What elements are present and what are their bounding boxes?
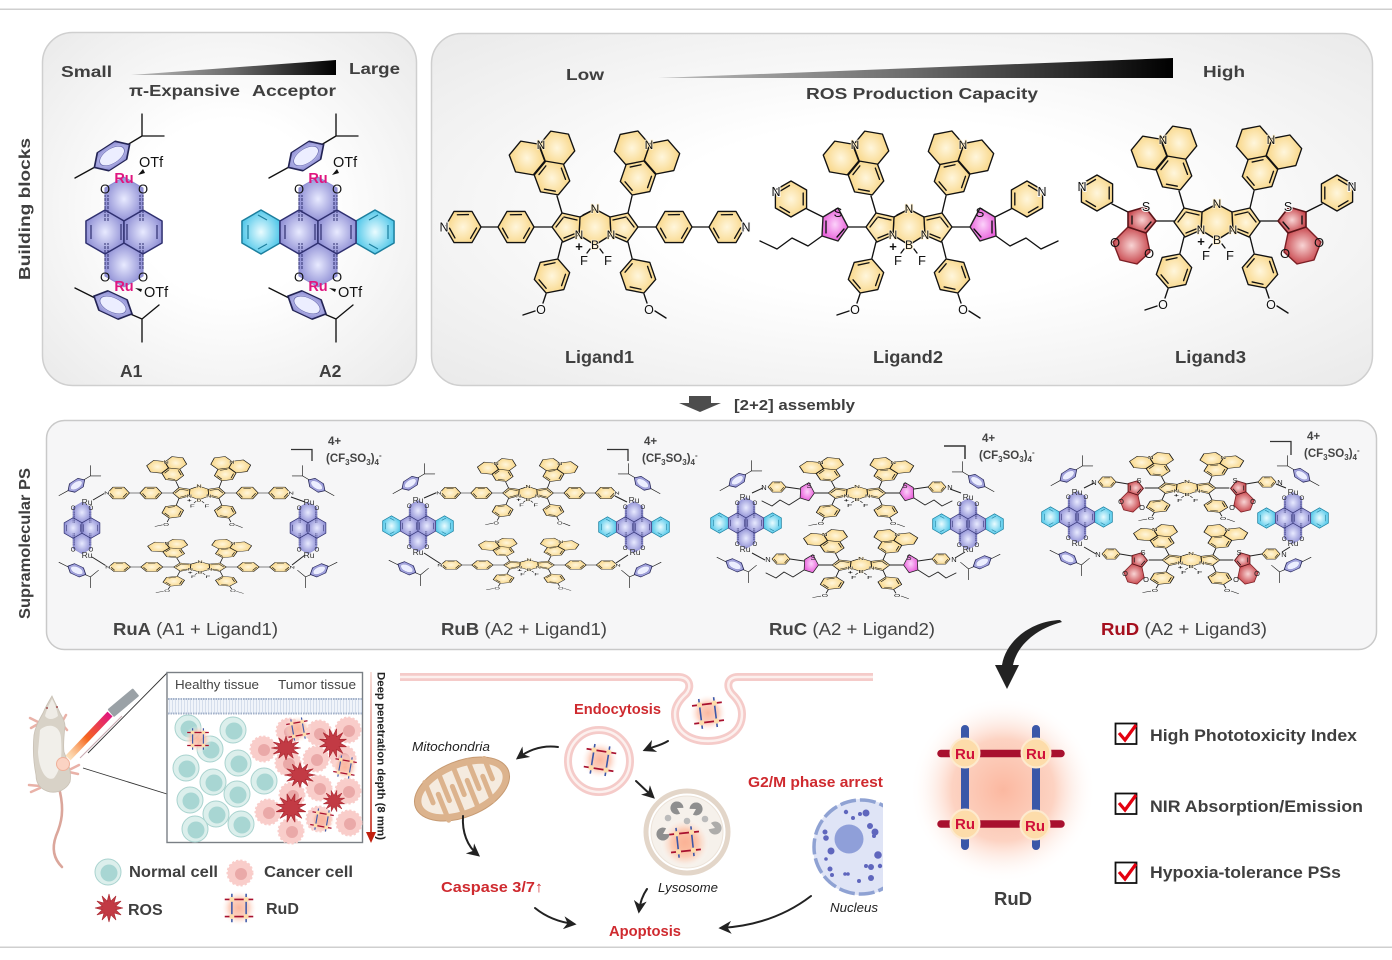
charge bracket RuA: SO [350,453,366,465]
arrow: caspase to apoptosis [535,908,574,924]
charge bracket RuB [607,436,698,467]
complex RuC: Ru [740,492,751,502]
zoom lines from mouse to tissue [83,673,167,794]
label: Ligand2: Ligand2 [873,347,943,367]
label: RuD: RuD [994,888,1032,909]
charge bracket RuD: 3 [1323,453,1328,462]
label: [2+2] assembly: [2+2] assembly [734,397,856,414]
charge bracket RuC: - [1032,448,1035,457]
caption: π-Expansive Acceptor: π-Expansive [129,83,240,100]
molecule A2: Ru [308,279,328,295]
charge bracket RuB: 4 [691,458,696,467]
label: A2: A2 [319,361,342,381]
charge bracket RuD: 4+ [1307,431,1320,443]
rotated heading: Supramolecular PS: Supramolecular PS [17,468,34,619]
charge bracket RuC: SO [1003,450,1019,462]
complex RuC: Ru [963,544,974,554]
arrow: penetration depth [366,672,376,843]
charge bracket RuA: 4+ [328,436,341,448]
arrow: mitochondria to caspase [463,816,478,855]
label: Caspase 3/7 up: Caspase 3/7↑ [441,879,543,896]
gradient wedge [658,58,1173,78]
pathway arrows [463,741,811,928]
membrane band [168,698,362,714]
arrow: pocket to vesicle [645,741,668,750]
charge bracket RuC: 4+ [982,433,995,445]
complex RuA: Ru [82,497,93,507]
icon: RuD in pocket [687,692,729,734]
label: RuC: RuC (A2 + Ligand2) [769,619,935,639]
caption: ROS Production Capacity: ROS Production Capacity [806,86,1038,103]
label: Apoptosis: Apoptosis [609,923,681,940]
checklist [1116,724,1363,883]
legend: normal cell: Normal cell [129,864,218,881]
legend: cancer cell [228,860,353,886]
icon: RuD schematic: Ru [955,816,975,833]
icon: mouse with laser [29,688,139,867]
complex RuC: Ru [963,492,974,502]
charge bracket RuD: (CF [1304,448,1323,460]
label: Ligand3: Ligand3 [1175,347,1246,367]
legend: RuD [221,890,299,926]
charge bracket RuA: ) [371,453,375,465]
charge bracket RuB: (CF [642,453,661,465]
charge bracket RuA: (CF [326,453,345,465]
label: G2/M phase arrest: G2/M phase arrest [748,774,883,791]
complex RuA: Ru [304,497,315,507]
ROS bursts [271,725,350,826]
molecule A1 [75,114,169,342]
charge bracket RuA: 3 [345,458,350,467]
arrow: nucleus to apoptosis [721,896,811,928]
complex RuB [383,457,669,591]
label: RuD: RuD (A2 + Ligand3) [1101,619,1267,639]
icon: RuD schematic: Ru [1026,746,1046,763]
rotated heading: Building blocks: Building blocks [17,138,34,280]
complex RuC [711,456,1003,599]
legend: ROS [95,894,163,922]
label: Lysosome: Lysosome [658,880,718,895]
complex RuC: Ru [740,544,751,554]
complex RuB: Ru [629,495,640,505]
charge bracket RuC: 4 [1028,455,1033,464]
charge bracket RuC: ) [1024,450,1028,462]
charge bracket RuB: - [695,451,698,460]
icon: nucleus [812,798,883,896]
label: Nucleus: Nucleus [830,900,879,915]
label: A1: A1 [120,361,143,381]
complex RuB: Ru [630,547,641,557]
molecule A1: Ru [114,279,134,295]
arrow: lysosome to apoptosis [639,889,647,911]
RuD particles [184,713,361,836]
charge bracket RuC: 3 [998,455,1003,464]
charge bracket RuD: ) [1349,448,1353,460]
icon: vesicle [568,730,630,792]
charge bracket RuD: SO [1328,448,1344,460]
icon: RuD schematic: Ru [1025,818,1045,835]
label: RuB: RuB (A2 + Ligand1) [441,619,607,639]
panel: ligands [432,34,1372,386]
complex RuB: Ru [413,547,424,557]
arrow: assembly step [679,396,721,412]
arrow: vesicle to lysosome [636,781,653,797]
check item: Hypoxia-tolerance PSs: Hypoxia-tolerance PSs [1150,863,1341,882]
complex RuA [59,454,337,593]
molecule A2: OTf [338,285,363,301]
charge bracket RuD: 3 [1344,453,1349,462]
molecule Ligand2 [760,126,1058,318]
molecule A1: Ru [114,171,134,187]
charge bracket RuD [1270,431,1360,462]
charge bracket RuA: 4 [375,458,380,467]
label: High: High [1203,64,1245,81]
arrow: vesicle to mitochondria [518,746,558,758]
legend: ROS: ROS [128,902,163,919]
icon: mitochondrion [405,744,519,834]
molecule Ligand3 [1077,121,1357,313]
normal cells [173,715,277,842]
molecule A2: Ru [308,171,328,187]
complex RuD: Ru [1288,487,1299,497]
cell membrane with endocytic pocket [400,677,873,741]
complex RuA: Ru [82,550,93,560]
label: Small: Small [61,64,112,81]
label: Low: Low [566,67,605,84]
legend: cancer cell: Cancer cell [264,864,353,881]
panel: tissue inset [167,672,362,844]
label: Ligand1: Ligand1 [565,347,634,367]
charge bracket RuC: (CF [979,450,998,462]
label: deep penetration depth: Deep penetration depth (8 mm) [374,672,386,840]
arrow: RuD highlight [995,620,1062,689]
charge bracket RuB: 3 [661,458,666,467]
panel: acceptor building blocks [42,32,416,386]
molecule A1: OTf [139,155,164,171]
caption: π-Expansive Acceptor: Acceptor [252,83,336,100]
charge bracket RuB: SO [666,453,682,465]
charge bracket RuB: 4+ [644,436,657,448]
complex RuD [1042,451,1328,594]
icon: RuD schematic [910,697,1096,883]
label: Tumor tissue: Tumor tissue [278,677,356,692]
gradient wedge [131,60,336,75]
complex RuD: Ru [1288,538,1299,548]
cancer cells [250,718,362,844]
label: Healthy tissue: Healthy tissue [175,677,259,692]
charge bracket RuC [944,433,1035,464]
molecule A1: OTf [144,285,169,301]
check item: High Phototoxicity Index: High Phototoxicity Index [1150,726,1358,745]
complex RuA: Ru [304,550,315,560]
check item: NIR Absorption/Emission [1116,794,1363,816]
caption: π-Expansive Acceptor [129,83,336,100]
label: Endocytosis: Endocytosis [574,701,661,718]
legend [95,859,353,926]
molecule Ligand1 [439,126,751,318]
charge bracket RuD: - [1357,446,1360,455]
label: Mitochondria: Mitochondria [412,739,490,754]
label: RuA: RuA (A1 + Ligand1) [113,619,278,639]
charge bracket RuB: 3 [682,458,687,467]
molecule A2: OTf [333,155,358,171]
charge bracket RuA: 3 [366,458,371,467]
legend: RuD: RuD [266,901,299,918]
charge bracket RuD: 4 [1353,453,1358,462]
molecule A2 [242,114,394,342]
charge bracket RuA: - [379,451,382,460]
check item: NIR Absorption/Emission: NIR Absorption/Emission [1150,797,1363,816]
complex RuD: Ru [1072,487,1083,497]
complex RuD: Ru [1072,538,1083,548]
complex RuB: Ru [413,495,424,505]
panel: supramolecular PS [46,420,1376,650]
label: Large: Large [349,61,400,78]
charge bracket RuA [291,436,382,467]
icon: lysosome [646,791,728,873]
charge bracket RuB: ) [687,453,691,465]
icon: RuD schematic: Ru [955,746,975,763]
charge bracket RuC: 3 [1019,455,1024,464]
legend: normal cell [95,859,218,885]
